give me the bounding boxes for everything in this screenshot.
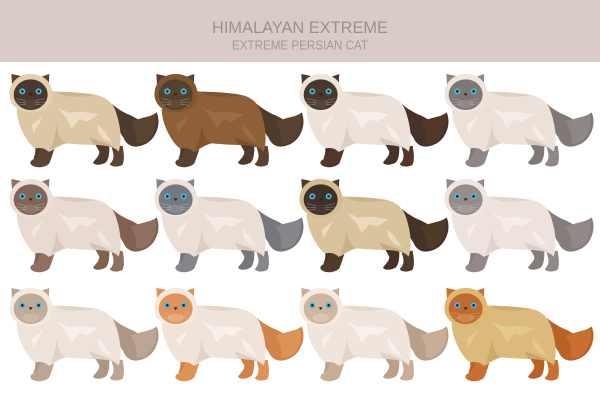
- cat: seal point on tan: [299, 179, 449, 272]
- cat: chocolate point: [9, 179, 159, 272]
- cat: seal point on cream: [9, 74, 159, 167]
- cat: dark seal point on white: [299, 74, 449, 167]
- cat: cream point: [299, 288, 449, 381]
- title band: [0, 0, 600, 62]
- cat: lilac point: [444, 179, 594, 272]
- title: HIMALAYAN EXTREME: [212, 18, 388, 37]
- cat: flame point: [154, 288, 304, 381]
- cat: red point on gold: [444, 288, 594, 381]
- cat: blue point: [154, 179, 304, 272]
- subtitle: EXTREME PERSIAN CAT: [232, 38, 368, 52]
- cat: grey point on white: [444, 74, 594, 167]
- cat: solid chocolate: [154, 74, 304, 167]
- cat: fawn point: [9, 288, 159, 381]
